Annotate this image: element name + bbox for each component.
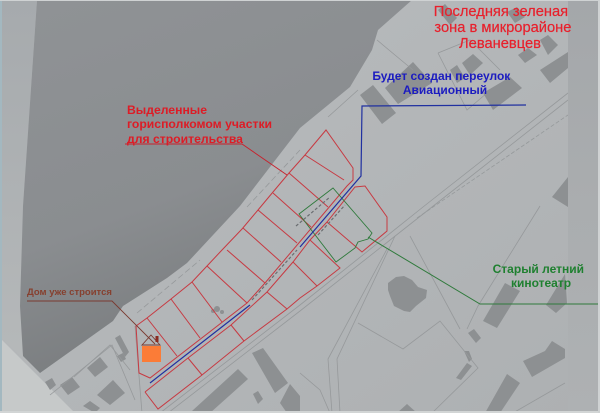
title: зона в микрорайоне: [434, 20, 571, 36]
label: new lane: Авиационный: [403, 83, 487, 97]
label: old summer cinema: Старый летний: [493, 262, 584, 276]
roads and light plan lines: [50, 40, 568, 413]
new lane route: [150, 105, 526, 383]
label: allocated plots: для строительства: [127, 132, 243, 146]
parcels: upper row: [136, 130, 353, 378]
bottom-left paper corner: [0, 338, 75, 413]
icon: house under construction: [142, 335, 161, 362]
label: allocated plots: горисполкомом участки: [127, 117, 272, 131]
cinema leader line: [368, 237, 600, 304]
title: Последняя зеленая: [434, 4, 568, 20]
label: house under construction: Дом уже строится: [27, 287, 112, 298]
label: old summer cinema: кинотеатр: [511, 276, 571, 290]
house leader line: [27, 301, 155, 344]
parcels leader line: [125, 144, 287, 175]
label: new lane: Будет создан переулок: [372, 69, 511, 83]
old summer cinema outline: [299, 188, 372, 262]
right margin band: [568, 0, 600, 413]
dark unbuilt area: [20, 0, 412, 373]
parcels: lower row: [145, 186, 387, 409]
street name on the plan: [252, 197, 345, 300]
label: allocated plots: Выделенные: [127, 103, 207, 117]
left margin strip: [0, 0, 40, 373]
title: Леваневцев: [459, 36, 541, 52]
